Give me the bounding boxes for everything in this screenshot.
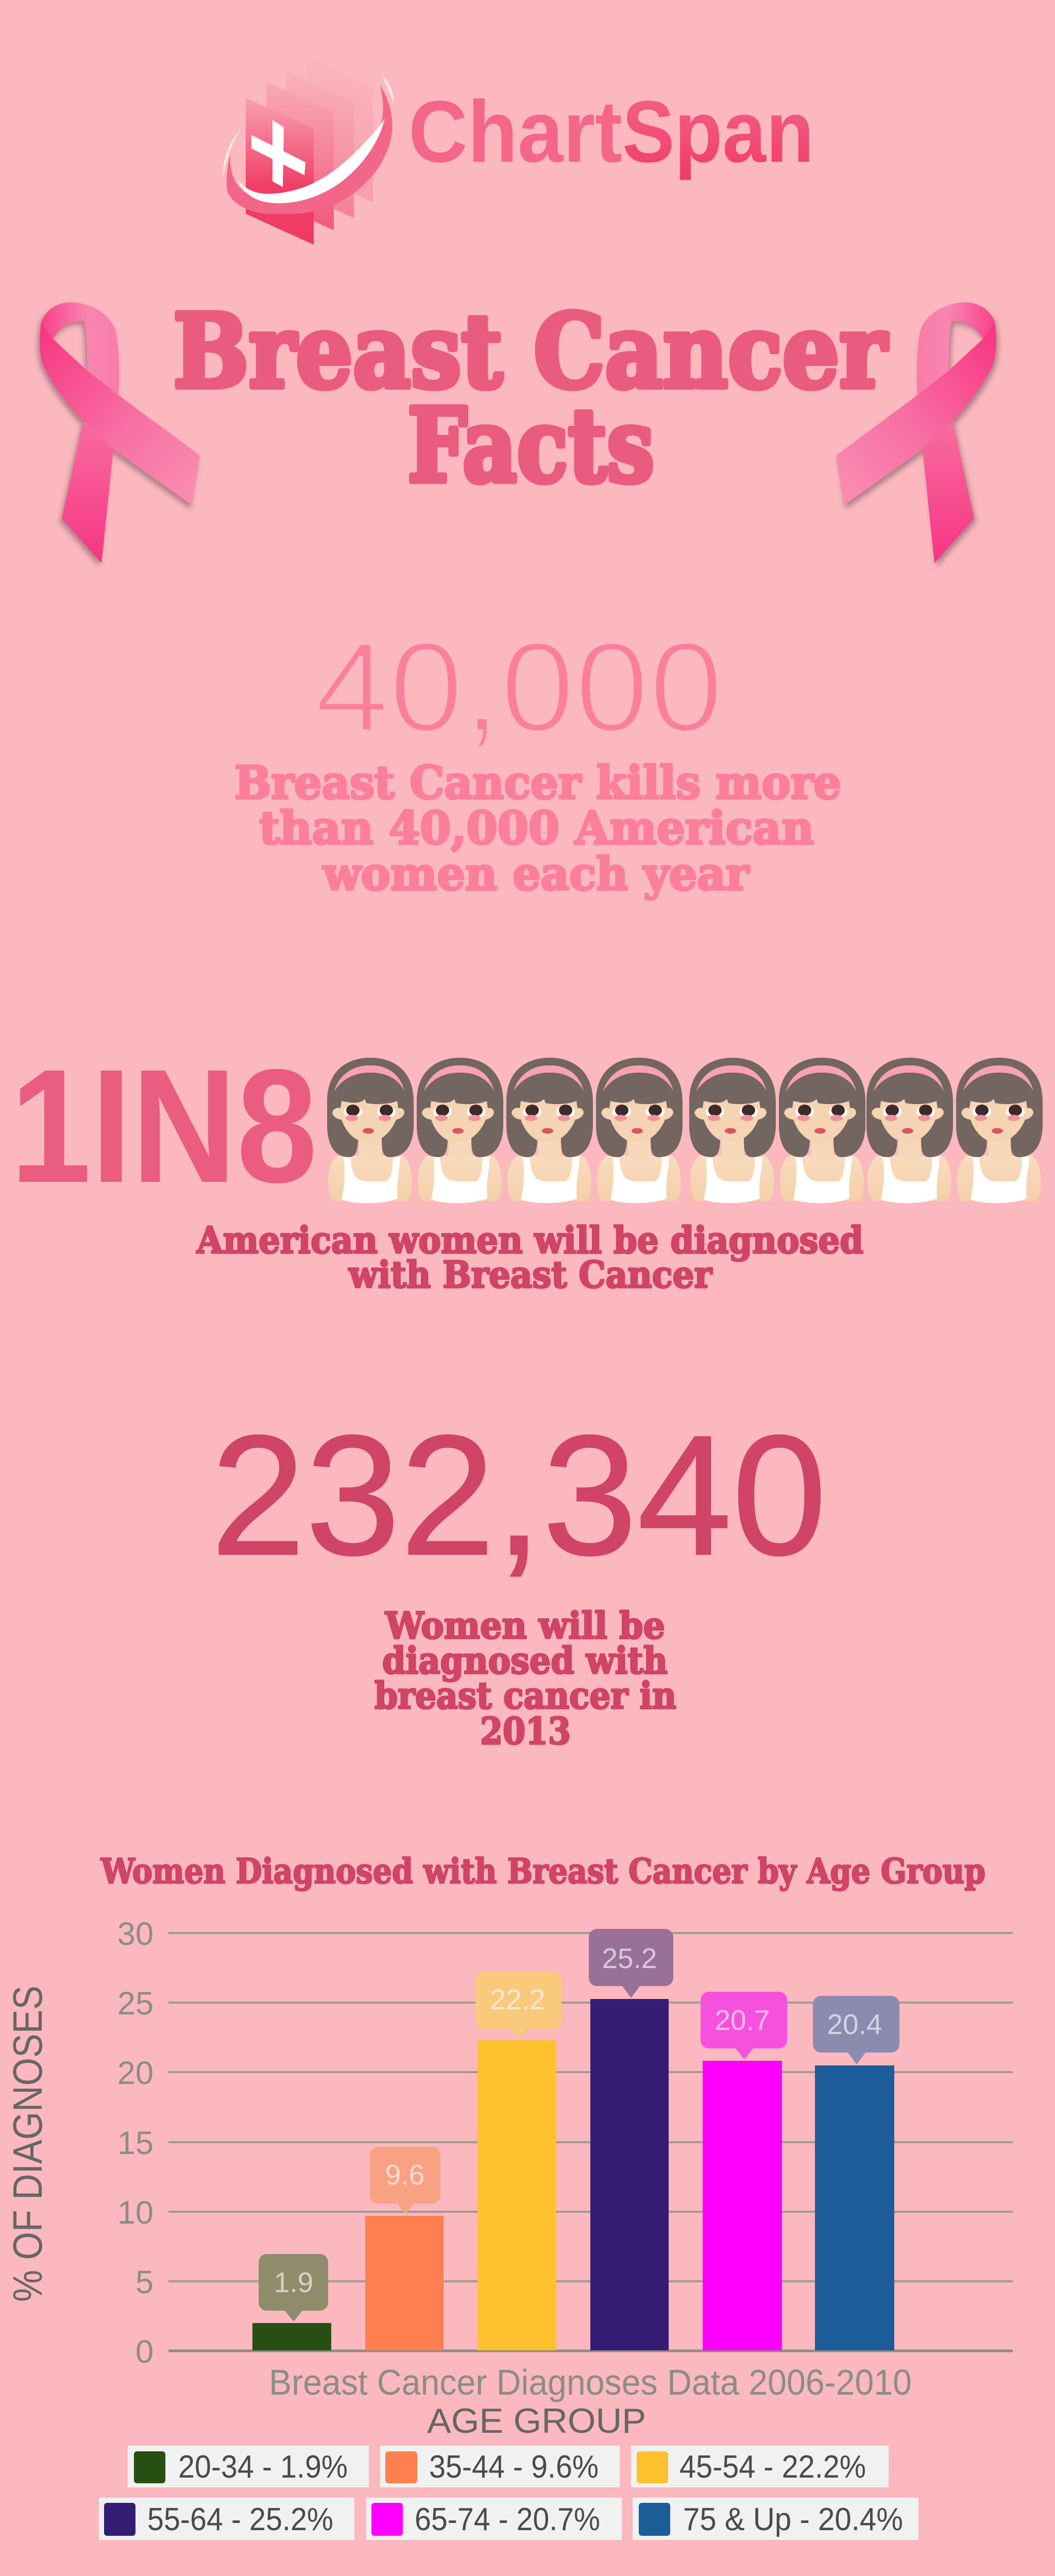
title: Breast Cancer xyxy=(173,292,888,411)
big number 232,340: 232,340 xyxy=(211,1400,827,1591)
value bubble 25.2: 25.2 xyxy=(602,1942,657,1974)
stat: 40,000 xyxy=(234,615,841,901)
caption: 2013 xyxy=(480,1709,571,1753)
y axis labels xyxy=(117,1916,154,2370)
stat: 232,340 xyxy=(211,1400,827,1753)
y axis labels: 30 xyxy=(117,1916,154,1952)
caption: diagnosed with xyxy=(382,1639,668,1682)
caption: Women will be xyxy=(385,1604,665,1647)
caption: women each year xyxy=(322,847,750,901)
legend: 75 & Up - 20.4% xyxy=(683,2502,903,2537)
y axis labels: 15 xyxy=(117,2125,154,2161)
value bubble 20.7: 20.7 xyxy=(714,2004,770,2036)
value bubble 20.4: 20.4 xyxy=(827,2008,882,2040)
bars xyxy=(252,1999,894,2350)
caption: American women will be diagnosed xyxy=(196,1218,863,1262)
logo: ChartSpan xyxy=(223,57,814,245)
y axis labels: 5 xyxy=(135,2264,154,2300)
caption xyxy=(375,1604,676,1753)
value bubble 9.6: 9.6 xyxy=(385,2159,424,2191)
value bubble 22.2 xyxy=(475,1972,561,2039)
icon: pink ribbon right xyxy=(836,302,998,567)
value bubble 20.7 xyxy=(701,1992,787,2059)
stat: 1 in 8 xyxy=(10,1036,1043,1296)
value bubble 1.9 xyxy=(259,2254,328,2321)
caption: breast cancer in xyxy=(375,1674,676,1717)
x axis title: AGE GROUP xyxy=(427,2401,646,2441)
y axis labels: 10 xyxy=(117,2195,154,2231)
legend: 35-44 - 9.6% xyxy=(429,2449,599,2485)
icon: layered shield with cross xyxy=(223,57,394,245)
value bubble 20.4 xyxy=(813,1996,899,2064)
y axis labels: 0 xyxy=(135,2334,154,2370)
caption: than 40,000 American xyxy=(259,801,814,855)
value bubble 1.9: 1.9 xyxy=(274,2266,313,2298)
value bubble 22.2: 22.2 xyxy=(490,1984,546,2015)
big label 1IN8: 1IN8 xyxy=(10,1036,317,1216)
y axis title: % OF DIAGNOSES xyxy=(5,1986,50,2302)
icon row: eight women xyxy=(327,1058,1043,1203)
icon: pink ribbon left xyxy=(38,302,200,567)
big number 40,000: 40,000 xyxy=(315,615,723,758)
caption: with Breast Cancer xyxy=(348,1253,712,1296)
x axis category label: Breast Cancer Diagnoses Data 2006-2010 xyxy=(269,2362,912,2402)
legend: 55-64 - 25.2% xyxy=(147,2502,333,2537)
legend: 45-54 - 22.2% xyxy=(679,2449,866,2485)
wordmark: Chart xyxy=(409,83,622,181)
value bubble 9.6 xyxy=(370,2147,440,2214)
legend: 20-34 - 1.9% xyxy=(178,2449,348,2485)
y axis labels: 20 xyxy=(117,2055,154,2091)
title xyxy=(173,292,888,505)
legend xyxy=(99,2446,918,2540)
y axis labels: 25 xyxy=(117,1986,154,2022)
caption xyxy=(234,756,841,901)
bar chart: women diagnosed by age group xyxy=(5,1851,1013,2540)
legend: 65-74 - 20.7% xyxy=(415,2502,600,2537)
caption xyxy=(196,1218,863,1296)
title: Facts xyxy=(407,386,654,505)
wordmark: Span xyxy=(622,83,814,181)
value bubble 25.2 xyxy=(589,1929,673,1998)
caption: Breast Cancer kills more xyxy=(234,756,841,809)
